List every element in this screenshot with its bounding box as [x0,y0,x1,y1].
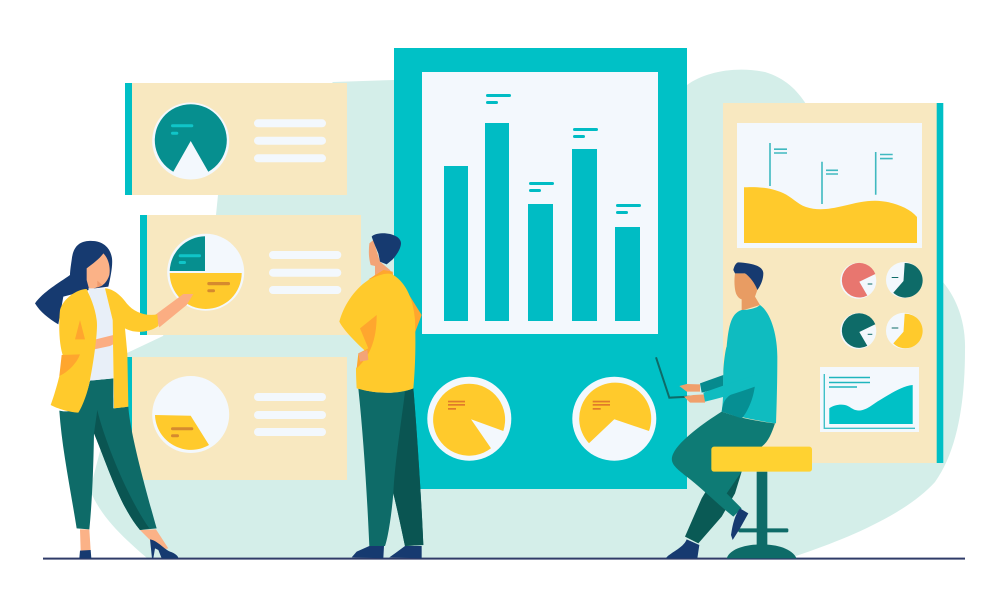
stool [727,472,797,558]
ground line [43,558,965,560]
panel: right dashboard [723,103,943,463]
pie: teal with white wedge [152,102,229,180]
text placeholder lines [254,119,326,162]
pie: white with yellow slice [152,376,229,453]
panel: top left info card [125,83,347,195]
mini pie: dark teal [840,313,876,349]
person: standing man [339,233,423,558]
mini pie: dark teal slice [886,262,923,298]
person: seated man with laptop on stool [656,262,812,558]
panel: central board [394,48,687,489]
panel: middle left info card [140,215,361,335]
mini pie: coral [840,263,876,299]
pie: quarters and half [167,234,244,311]
person: woman presenting [35,241,193,558]
background blob [90,70,965,558]
panel: bottom left info card [125,357,347,480]
pie: right board gauge [572,377,656,461]
text placeholder lines [269,251,341,294]
bar chart [422,72,658,334]
area chart with flags [737,123,922,248]
small area chart [820,367,919,432]
text placeholder lines [254,393,326,436]
mini pie: yellow slice [886,313,923,349]
pie: left board gauge [427,377,511,461]
